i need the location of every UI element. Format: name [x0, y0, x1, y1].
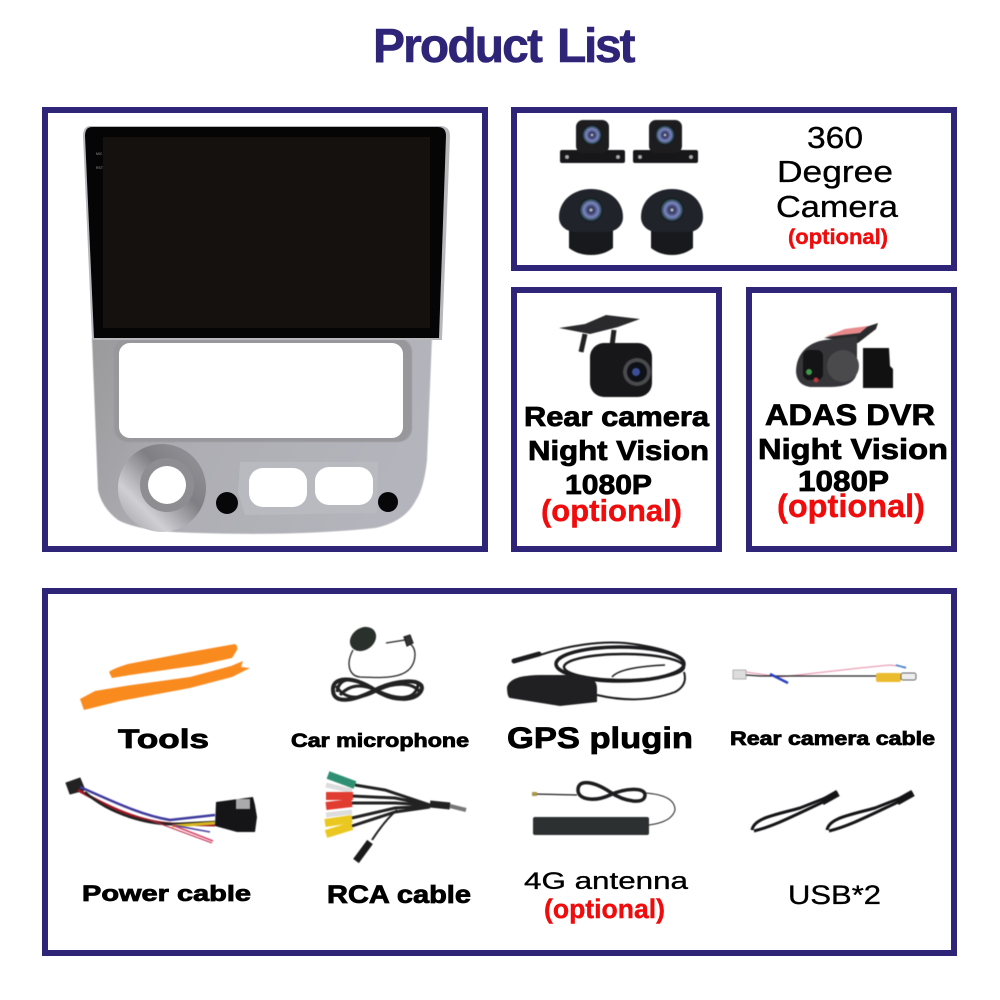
label 4G antenna: 4G antenna — [524, 868, 689, 895]
screen housing — [83, 126, 450, 340]
MIC label: MIC — [96, 152, 103, 156]
SD card icon — [863, 348, 893, 388]
label Night Vision: Night Vision — [758, 434, 948, 466]
optional note: (optional) — [777, 488, 925, 524]
panel: 360 degree camera — [514, 110, 954, 268]
label USB*2: USB*2 — [788, 880, 881, 910]
display — [103, 137, 430, 328]
RST label: RST — [96, 166, 104, 170]
label GPS plugin: GPS plugin — [507, 722, 693, 755]
label ADAS DVR: ADAS DVR — [765, 399, 935, 432]
title: Product — [373, 20, 543, 73]
dome camera 1 — [559, 189, 623, 255]
title: List — [557, 20, 635, 73]
label Tools: Tools — [118, 724, 209, 754]
label Rear camera cable: Rear camera cable — [730, 729, 935, 750]
icon: 4G antenna — [532, 783, 675, 835]
optional note: (optional) — [788, 226, 888, 249]
icon: car microphone — [333, 622, 422, 700]
label 1080P: 1080P — [565, 469, 652, 500]
label Degree: Degree — [777, 154, 893, 189]
optional note: (optional) — [541, 493, 682, 528]
DVR icon — [796, 323, 878, 387]
icon: rear camera cable — [733, 665, 916, 683]
panel: ADAS DVR — [749, 290, 954, 549]
icon: trim tools — [80, 644, 250, 710]
screw hole right — [378, 492, 398, 512]
screen bezel — [85, 127, 446, 338]
label Night Vision: Night Vision — [528, 435, 709, 466]
label Camera: Camera — [776, 189, 899, 224]
inner bezel of fascia cutout — [114, 338, 412, 442]
optional note: (optional) — [544, 894, 665, 924]
knob opening — [118, 444, 206, 532]
bracket camera 2 — [633, 120, 698, 163]
icon: GPS plugin — [507, 642, 685, 706]
label RCA cable: RCA cable — [327, 881, 471, 909]
label Rear camera: Rear camera — [524, 401, 709, 432]
bracket camera 1 — [560, 120, 625, 163]
panel: head unit — [45, 110, 485, 549]
cutout — [119, 343, 403, 438]
button plate — [238, 462, 378, 515]
label Power cable: Power cable — [82, 881, 251, 906]
panel: rear camera — [514, 290, 719, 549]
rear camera icon — [559, 315, 652, 397]
icon: USB cables — [752, 793, 913, 831]
label 360: 360 — [807, 120, 863, 155]
icon: power cable — [66, 778, 257, 843]
panel: accessories — [45, 591, 954, 953]
screw hole left — [216, 492, 238, 514]
dome camera 2 — [641, 189, 703, 255]
icon: RCA cable — [325, 775, 466, 861]
label Car microphone: Car microphone — [291, 731, 469, 752]
silver fascia frame — [92, 338, 432, 534]
label 1080P: 1080P — [798, 466, 889, 498]
